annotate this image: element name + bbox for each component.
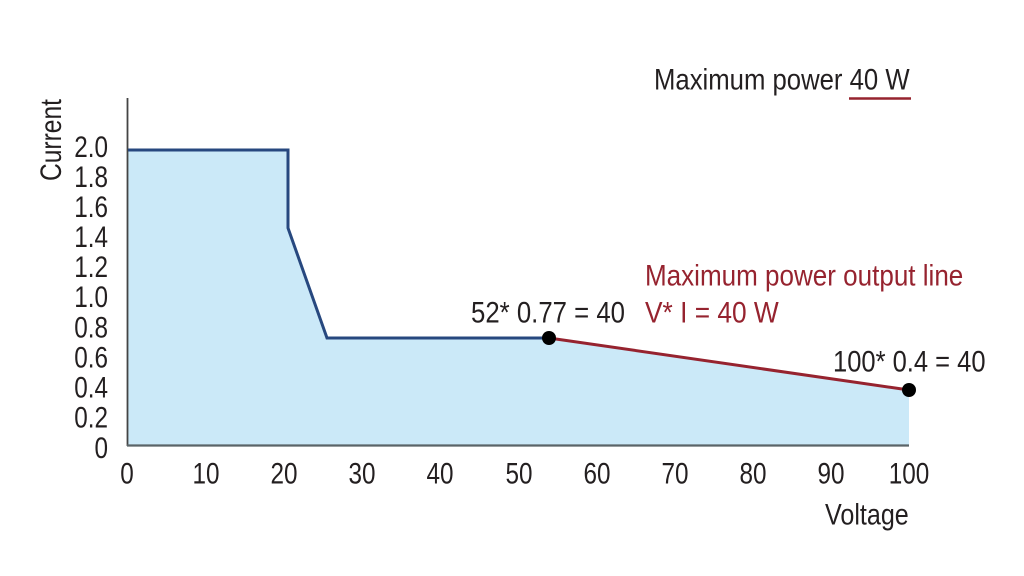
y axis labels: 0.8 (74, 310, 108, 344)
blue limit line (128, 150, 549, 338)
x axis labels (120, 456, 929, 490)
x axis labels: 30 (348, 456, 376, 490)
y axis labels: 2.0 (74, 130, 108, 164)
y axis labels: 0.6 (74, 340, 108, 374)
x axis labels: 50 (505, 456, 533, 490)
vertical axis (126, 98, 128, 446)
x axis labels: 20 (270, 456, 298, 490)
x axis labels: 0 (120, 456, 134, 490)
y axis labels: 1.8 (74, 160, 108, 194)
x axis labels: 10 (192, 456, 220, 490)
data point 52V (542, 331, 556, 345)
x axis labels: 80 (739, 456, 767, 490)
shaded operating area (128, 150, 909, 445)
x axis title: Voltage (825, 497, 909, 531)
horizontal axis (127, 444, 909, 447)
y axis labels: 1.4 (74, 220, 108, 254)
y axis labels: 0.2 (74, 400, 108, 434)
maximum power line (549, 338, 909, 390)
y axis labels: 1.2 (74, 250, 108, 284)
y axis labels: 0.4 (74, 370, 108, 404)
legend: Maximum power 40 W (654, 63, 910, 96)
x axis labels: 40 (426, 456, 454, 490)
y axis labels (74, 130, 108, 465)
annotation: maximum power output line (645, 259, 963, 329)
y axis title: Current (34, 99, 68, 181)
annotation: 52V point: 52* 0.77 = 40 (471, 296, 625, 329)
x axis labels: 100 (889, 456, 929, 490)
annotation: 100V point: 100* 0.4 = 40 (833, 345, 986, 378)
x axis labels: 60 (583, 456, 611, 490)
data point 100V (902, 383, 916, 397)
annotation: maximum power output line: Maximum power output line (645, 259, 963, 292)
y axis labels: 1.0 (74, 280, 108, 314)
y axis labels: 1.6 (74, 190, 108, 224)
x axis labels: 70 (661, 456, 689, 490)
annotation: maximum power output line: V* I = 40 W (645, 295, 779, 329)
y axis labels: 0 (94, 431, 108, 465)
x axis labels: 90 (817, 456, 845, 490)
